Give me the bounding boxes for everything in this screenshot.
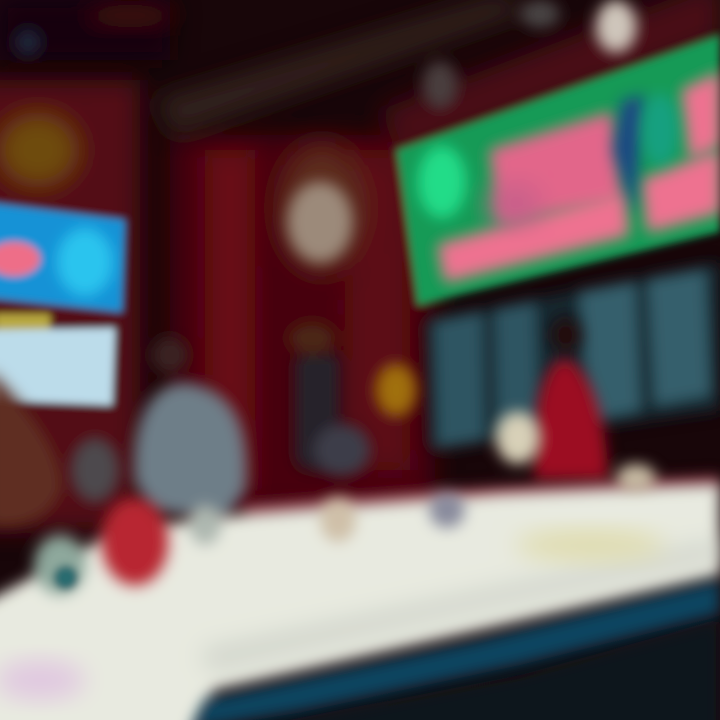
- green sign board: [397, 35, 720, 305]
- table back edge: red glow: [240, 476, 720, 522]
- left blue screen: [0, 203, 125, 312]
- ceiling lights: [422, 0, 636, 109]
- screen columns under sign: [425, 262, 720, 450]
- wall emblem: gold: [0, 112, 80, 188]
- center dark figure and yellow accent: [288, 322, 416, 476]
- table front edge: [190, 580, 720, 720]
- table objects: [34, 412, 656, 595]
- background: walls and curtains: [0, 0, 720, 530]
- white table: [0, 484, 720, 720]
- wall clock: [276, 142, 368, 274]
- yellow strip: [0, 314, 50, 330]
- left white screen: [0, 328, 115, 405]
- grey figure: [134, 337, 246, 520]
- ceiling beam: [155, 0, 530, 135]
- red figure right: [534, 317, 608, 480]
- small grey figure: [71, 438, 119, 502]
- brown figure left: [0, 370, 62, 526]
